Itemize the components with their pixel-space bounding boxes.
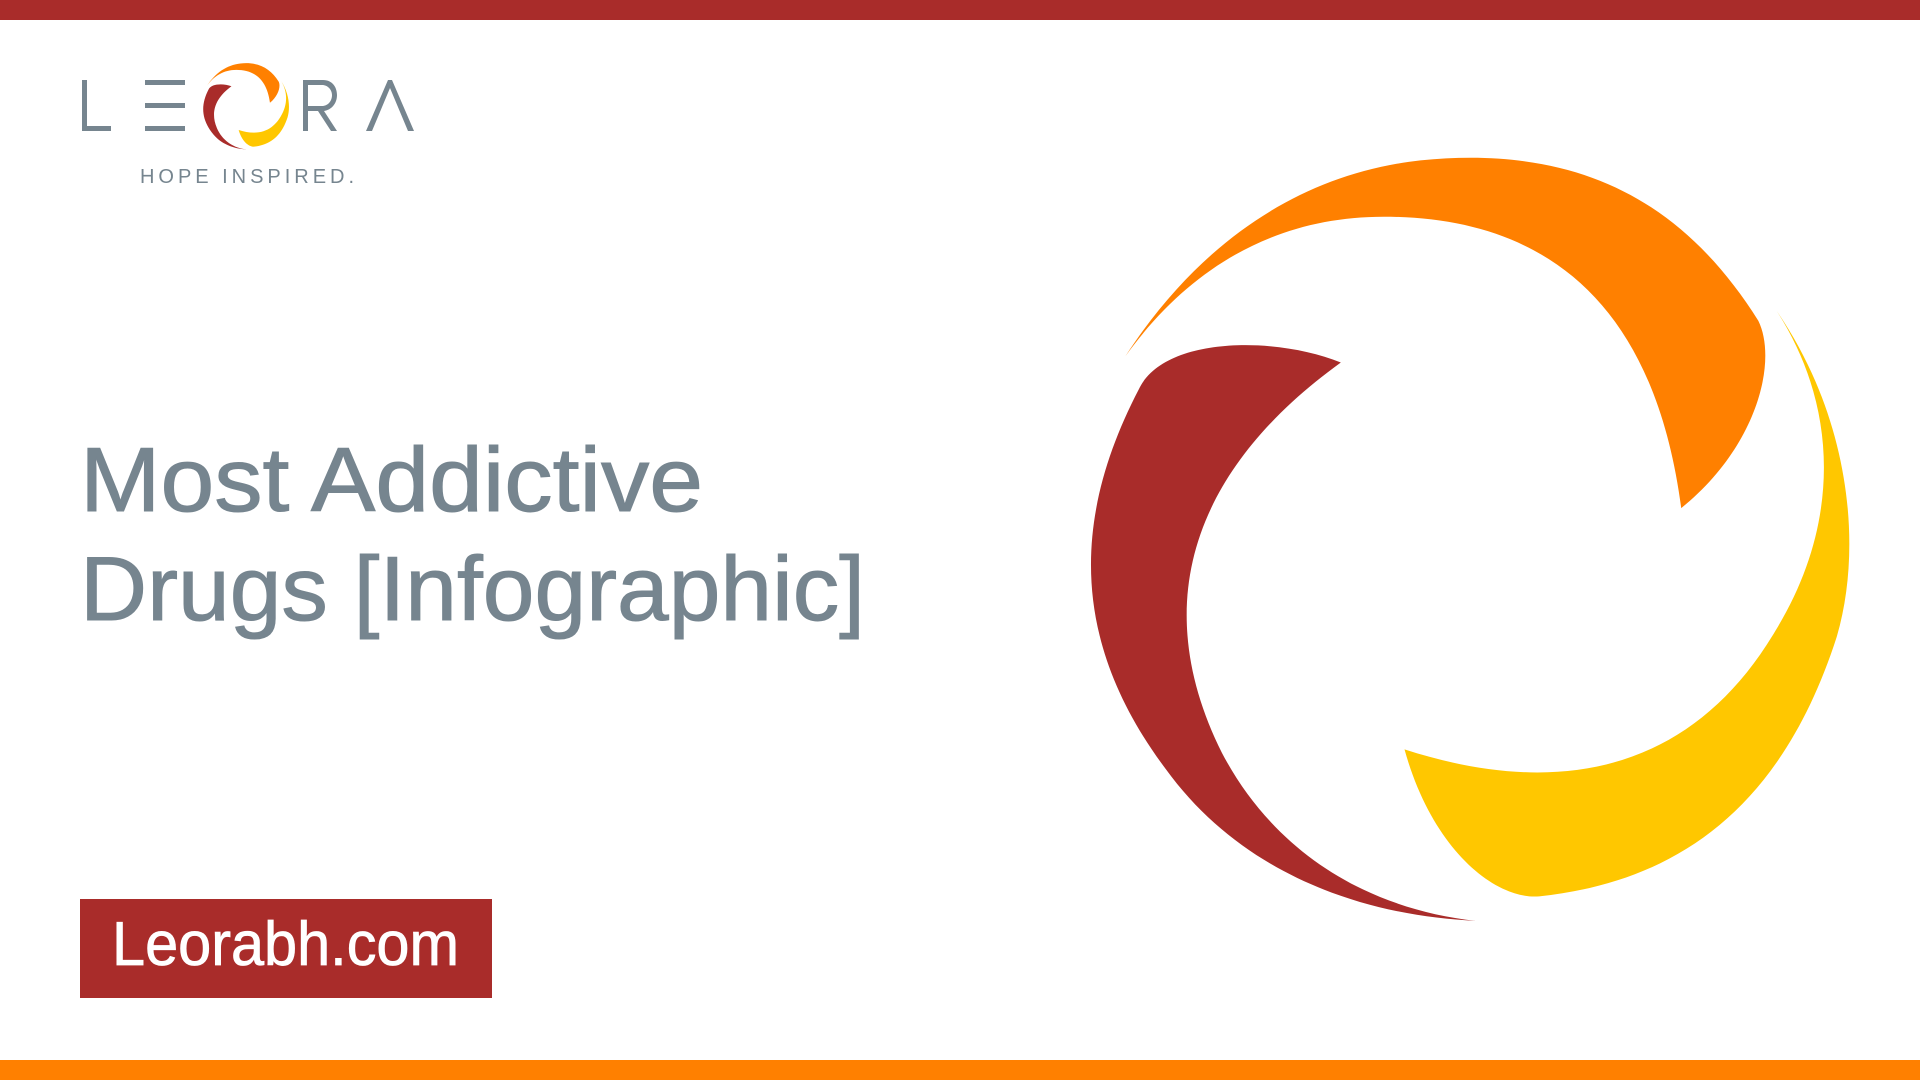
title line 1: Most Addictive [80,430,703,531]
bottom bar [0,1060,1920,1080]
logo letter R [303,80,337,131]
red swirl arm [1091,345,1476,921]
website button [80,899,492,998]
large swirl graphic [1091,158,1849,921]
logo swirl icon [203,63,289,149]
yellow swirl arm [1405,311,1849,897]
logo: Leora wordmark with swirl and tagline [82,63,414,188]
logo letter L [82,80,111,131]
logo tagline: HOPE INSPIRED. [140,166,354,188]
logo letter A [366,80,414,131]
title [80,430,865,640]
button background [80,899,492,998]
title line 2: Drugs [Infographic] [80,539,865,640]
button label: Leorabh.com [112,910,459,979]
orange swirl arm [1125,158,1765,508]
top bar [0,0,1920,20]
logo letter E [145,80,185,131]
